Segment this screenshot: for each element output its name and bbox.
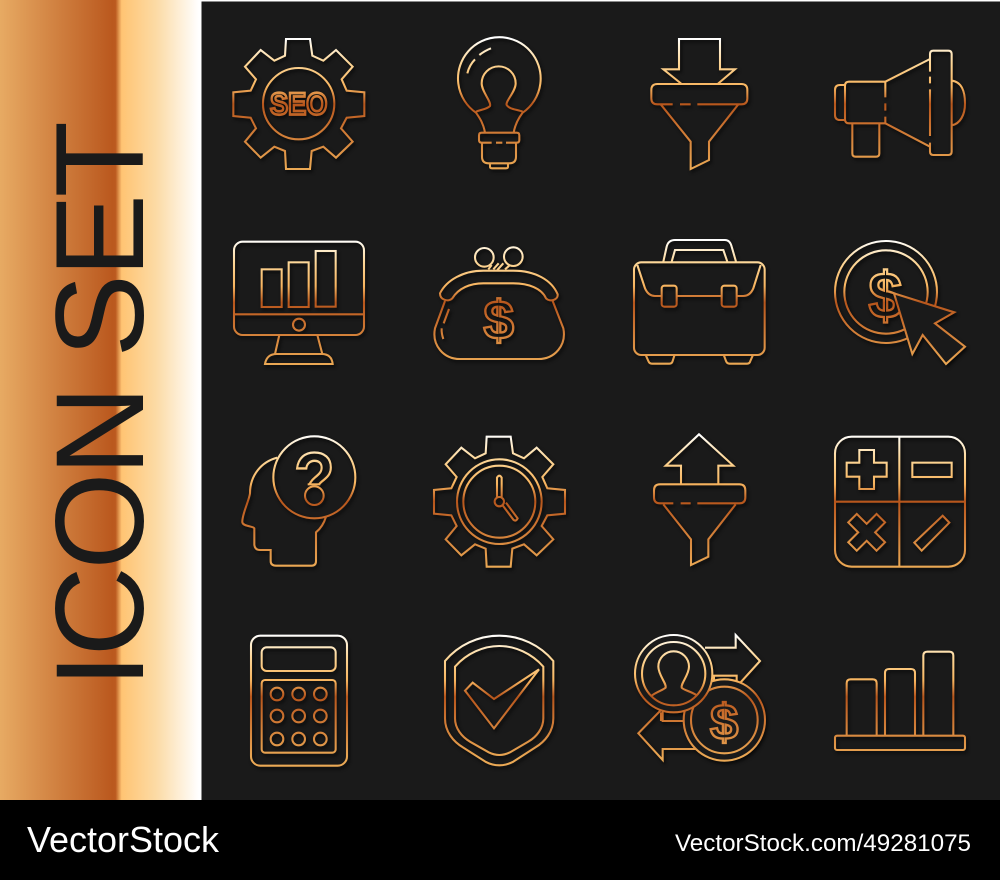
icon: person and dollar exchange — [635, 635, 765, 761]
title: ICON SET: ICON SET — [31, 121, 170, 688]
icon: briefcase — [634, 240, 765, 364]
icon: monitor with bar chart — [234, 242, 364, 364]
icon: calculator — [251, 636, 347, 766]
icon: person and dollar exchange: $ — [710, 695, 739, 751]
icon: coin purse: $ — [483, 289, 514, 351]
icon: head with question mark — [242, 436, 355, 566]
icon: SEO gear — [233, 39, 364, 169]
icon: megaphone — [835, 51, 965, 157]
icon: funnel with up arrow — [654, 434, 745, 565]
footer brand: VectorStock — [27, 819, 220, 860]
footer image id: VectorStock.com/49281075 — [675, 830, 971, 857]
icon: head with question mark: ? — [294, 437, 335, 521]
icon: dollar coin with cursor: $ — [868, 258, 902, 331]
icon: SEO gear: SEO — [270, 87, 327, 122]
icon: shield with check mark — [445, 636, 553, 765]
icon: light bulb — [458, 37, 541, 168]
panel: gradient side band — [0, 0, 201, 800]
panel: dark icon field — [202, 2, 1000, 800]
icon: funnel with down arrow — [651, 39, 747, 169]
icon: bar chart — [835, 652, 965, 750]
icon: coin purse — [434, 247, 564, 359]
icon: maths operations — [835, 437, 965, 567]
icon: dollar coin with cursor — [835, 241, 965, 364]
footer bar — [0, 800, 1000, 880]
icon: gear with clock — [434, 437, 565, 567]
